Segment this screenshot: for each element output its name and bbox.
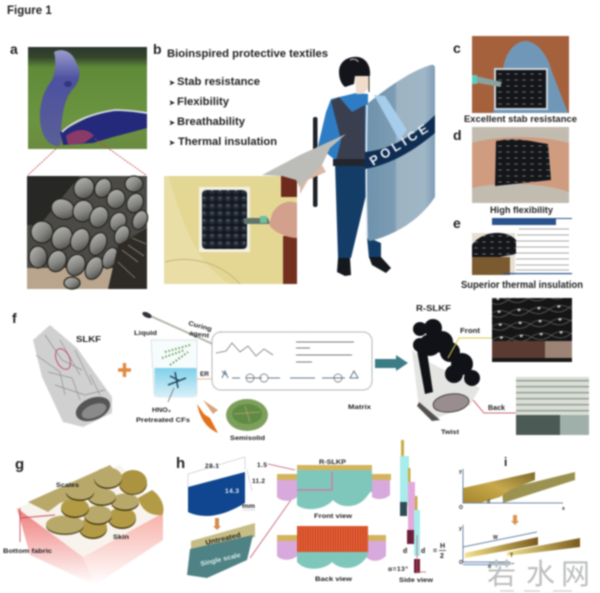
forearm behind shield: [374, 95, 407, 140]
blue scale: [188, 472, 245, 516]
semisolid blob: [226, 399, 268, 431]
orange arrow: [511, 515, 519, 525]
thermal bottom rule: [503, 273, 572, 274]
dimension 1.5: 1.5: [257, 462, 267, 469]
dimension 11.2: 11.2: [252, 478, 265, 485]
feature list: ➤: [169, 80, 175, 87]
panel a: cobra: [10, 41, 151, 289]
panel label a: a: [10, 41, 18, 57]
panel i: overlap geometry: [459, 455, 590, 591]
R-SLKP label: R-SLKP: [319, 460, 346, 466]
SLKF label: SLKF: [76, 334, 101, 344]
lower diagram: [459, 525, 580, 570]
band with POLICE lettering: [365, 115, 435, 169]
panel d: flexibility: [453, 127, 569, 215]
pants and shoes: [335, 162, 366, 258]
police officer with shield: [313, 57, 435, 276]
dimension lines: [188, 457, 255, 510]
untreated single scale: [187, 523, 255, 578]
pretreated CFs label: Pretreated CFs: [136, 417, 190, 424]
curing agent label second line: agent: [189, 330, 210, 340]
police officer with shield: POLICE: [367, 121, 431, 169]
lower diagram: O: [459, 560, 463, 566]
formula d1 = H/2: [403, 543, 446, 560]
front label: Front: [460, 328, 481, 335]
panel g: scale structure: [3, 456, 164, 585]
arms and shirt: [318, 93, 368, 160]
panel h: scale dimensions: [176, 440, 446, 584]
bottom fabric pointer: [20, 508, 55, 542]
front view: [277, 465, 391, 509]
watermark footer: [500, 590, 572, 592]
formula d1 = H/2: =: [433, 548, 437, 555]
photo: stab test on fabric: [164, 176, 297, 284]
feature list: Thermal insulation: [178, 136, 277, 148]
feature list: ➤: [169, 140, 175, 147]
formula d1 = H/2: 2: [440, 553, 444, 560]
back view label: Back view: [315, 576, 353, 583]
beaker: [151, 340, 197, 397]
untreated label: Untreated: [205, 532, 242, 547]
feature list: Breathability: [177, 116, 246, 128]
upper diagram: [459, 469, 575, 512]
dropper bulb: [141, 311, 153, 319]
panel label d: d: [453, 127, 462, 143]
riot shield: [366, 65, 435, 241]
angle label: α=13°: [388, 565, 408, 573]
panel label b: b: [153, 41, 162, 57]
back micrograph: [516, 377, 589, 435]
scales label: Scales: [56, 482, 79, 489]
title: Figure 1: [7, 5, 52, 17]
feature list: ➤: [169, 100, 175, 107]
front view label: Front view: [314, 513, 353, 520]
side view stack: [400, 440, 426, 573]
lower diagram: W: [493, 535, 498, 541]
lower diagram: T: [510, 553, 513, 559]
golden scale disks: [28, 465, 164, 539]
thermal header bar: [492, 218, 556, 225]
caption c: Excellent stab resistance: [464, 114, 577, 125]
panel label f: f: [12, 310, 17, 326]
upper diagram: d: [487, 499, 490, 505]
feature list: ➤: [169, 120, 175, 127]
R-SLKF twisted fabric: [412, 319, 480, 421]
thermal body text: [516, 229, 569, 270]
photo: cobra on grass: [28, 47, 147, 149]
upper diagram: O: [459, 505, 463, 511]
formula d1 = H/2: d: [421, 548, 425, 555]
panel e: thermal insulation: [453, 215, 583, 291]
orange down arrow: [213, 518, 221, 530]
lower diagram: y: [459, 526, 462, 532]
orange swoosh arrow: [197, 404, 218, 433]
panel label e: e: [453, 215, 461, 231]
flow arrow: [375, 355, 408, 371]
bottom fabric label: Bottom fabric: [3, 548, 52, 555]
caption d: High flexibility: [490, 205, 553, 215]
formula d1 = H/2: d: [403, 548, 407, 555]
back label: Back: [488, 405, 505, 412]
dimension 14.3: 14.3: [225, 488, 239, 495]
HNO3 label: HNO₃: [152, 407, 171, 414]
baton: [313, 117, 318, 207]
brush: [203, 400, 218, 414]
watermark: 若水网: [487, 558, 590, 591]
panel label h: h: [176, 455, 185, 472]
feature list: Stab resistance: [177, 76, 260, 88]
feature list: [169, 76, 277, 148]
ER arrow: [197, 378, 214, 380]
head and helmet: [355, 72, 369, 94]
panel label i: i: [504, 455, 507, 469]
thermal image: [472, 233, 516, 275]
panel f: fabrication: [12, 298, 589, 442]
zoom lines: [28, 139, 146, 175]
semisolid label: Semisolid: [230, 435, 265, 442]
twist label: Twist: [441, 429, 460, 436]
R-SLKF label: R-SLKF: [416, 303, 451, 313]
ER label: ER: [200, 371, 209, 378]
matrix formula box: [212, 332, 372, 390]
upper diagram: y: [459, 469, 462, 475]
plus sign: [118, 363, 131, 377]
matrix label: Matrix: [348, 404, 371, 411]
panel label c: c: [453, 40, 461, 56]
panel c: stab resistance: [453, 36, 577, 125]
caption e: Superior thermal insulation: [461, 280, 583, 291]
skin block: [17, 465, 163, 585]
pointer lines: [250, 464, 298, 558]
back pointer: [473, 400, 516, 413]
back view: [277, 526, 386, 569]
liquid label: Liquid: [134, 330, 157, 337]
CF pointer line: [168, 388, 174, 402]
dimension 28.1: 28.1: [205, 463, 219, 470]
heading b: Bioinspired protective textiles: [167, 48, 328, 60]
single scale label: Single scale: [200, 552, 242, 568]
unit mm: mm: [242, 503, 255, 510]
formula d1 = H/2: H: [440, 543, 445, 550]
lower diagram: d: [488, 564, 491, 570]
front micrograph: [492, 298, 572, 362]
photo: snake scales close-up: [27, 174, 151, 289]
photo d: [472, 127, 569, 203]
SLKF fabric tube: [33, 325, 114, 427]
panel label g: g: [15, 456, 24, 473]
front pointer: [448, 338, 492, 358]
curing agent label: Curing: [187, 320, 212, 333]
photo c: [472, 36, 569, 113]
skin label: Skin: [113, 534, 129, 541]
side view label: Side view: [399, 577, 434, 584]
upper diagram: x: [562, 506, 565, 512]
dropper: [146, 314, 215, 345]
knife blade and hand: [262, 134, 346, 194]
feature list: Flexibility: [177, 96, 230, 108]
panel b: bioinspired protective textiles: [153, 41, 435, 284]
